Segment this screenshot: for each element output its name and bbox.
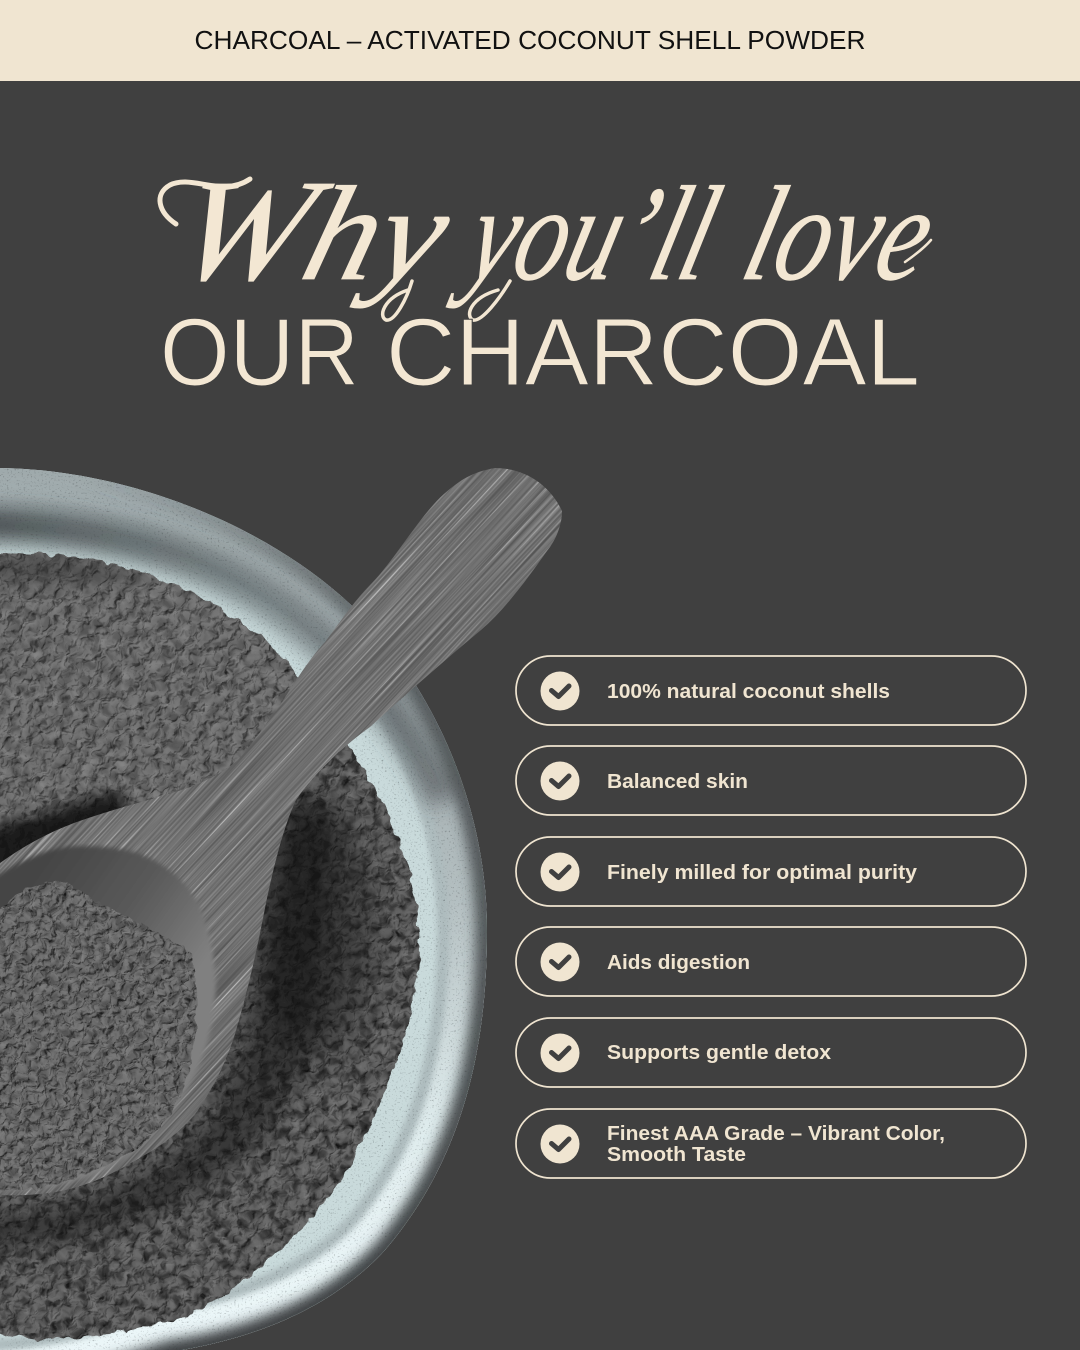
script heading: you’ll — [445, 159, 734, 308]
benefit: aids digestion: Aids digestion — [607, 951, 750, 974]
script flourishes — [160, 179, 931, 320]
title — [159, 151, 950, 406]
heading second line: CHARCOAL — [386, 299, 920, 406]
benefit: gentle detox: Supports gentle detox — [607, 1041, 832, 1064]
heading second line: OUR — [160, 299, 359, 406]
powder in spoon — [0, 870, 205, 1195]
benefit: finely milled: Finely milled for optimal purity — [607, 861, 918, 884]
benefit: balanced skin — [516, 746, 1026, 815]
benefit: natural coconut shells: 100% natural coconut shells — [607, 680, 890, 703]
script heading — [159, 151, 950, 311]
header title: CHARCOAL – ACTIVATED COCONUT SHELL POWDER — [194, 25, 865, 55]
benefit: AAA grade: Finest AAA Grade – Vibrant Color, — [607, 1122, 945, 1145]
benefit: natural coconut shells — [516, 656, 1026, 725]
benefit: finely milled — [516, 837, 1026, 906]
image: bowl of charcoal powder with spoon — [0, 468, 562, 1350]
charcoal powder in bowl — [0, 540, 430, 1350]
benefit: AAA grade — [516, 1109, 1026, 1178]
benefit: gentle detox — [516, 1018, 1026, 1087]
script heading: love — [730, 159, 950, 308]
benefit: aids digestion — [516, 927, 1026, 996]
benefit: balanced skin: Balanced skin — [607, 770, 748, 793]
script heading: Why — [159, 151, 469, 311]
wooden spoon — [0, 468, 562, 1196]
benefits list — [516, 656, 1026, 1178]
ceramic bowl rim — [0, 460, 490, 1350]
spoon hollow — [0, 846, 216, 1192]
header banner — [0, 0, 1080, 81]
benefit: AAA grade: Smooth Taste — [607, 1143, 746, 1166]
